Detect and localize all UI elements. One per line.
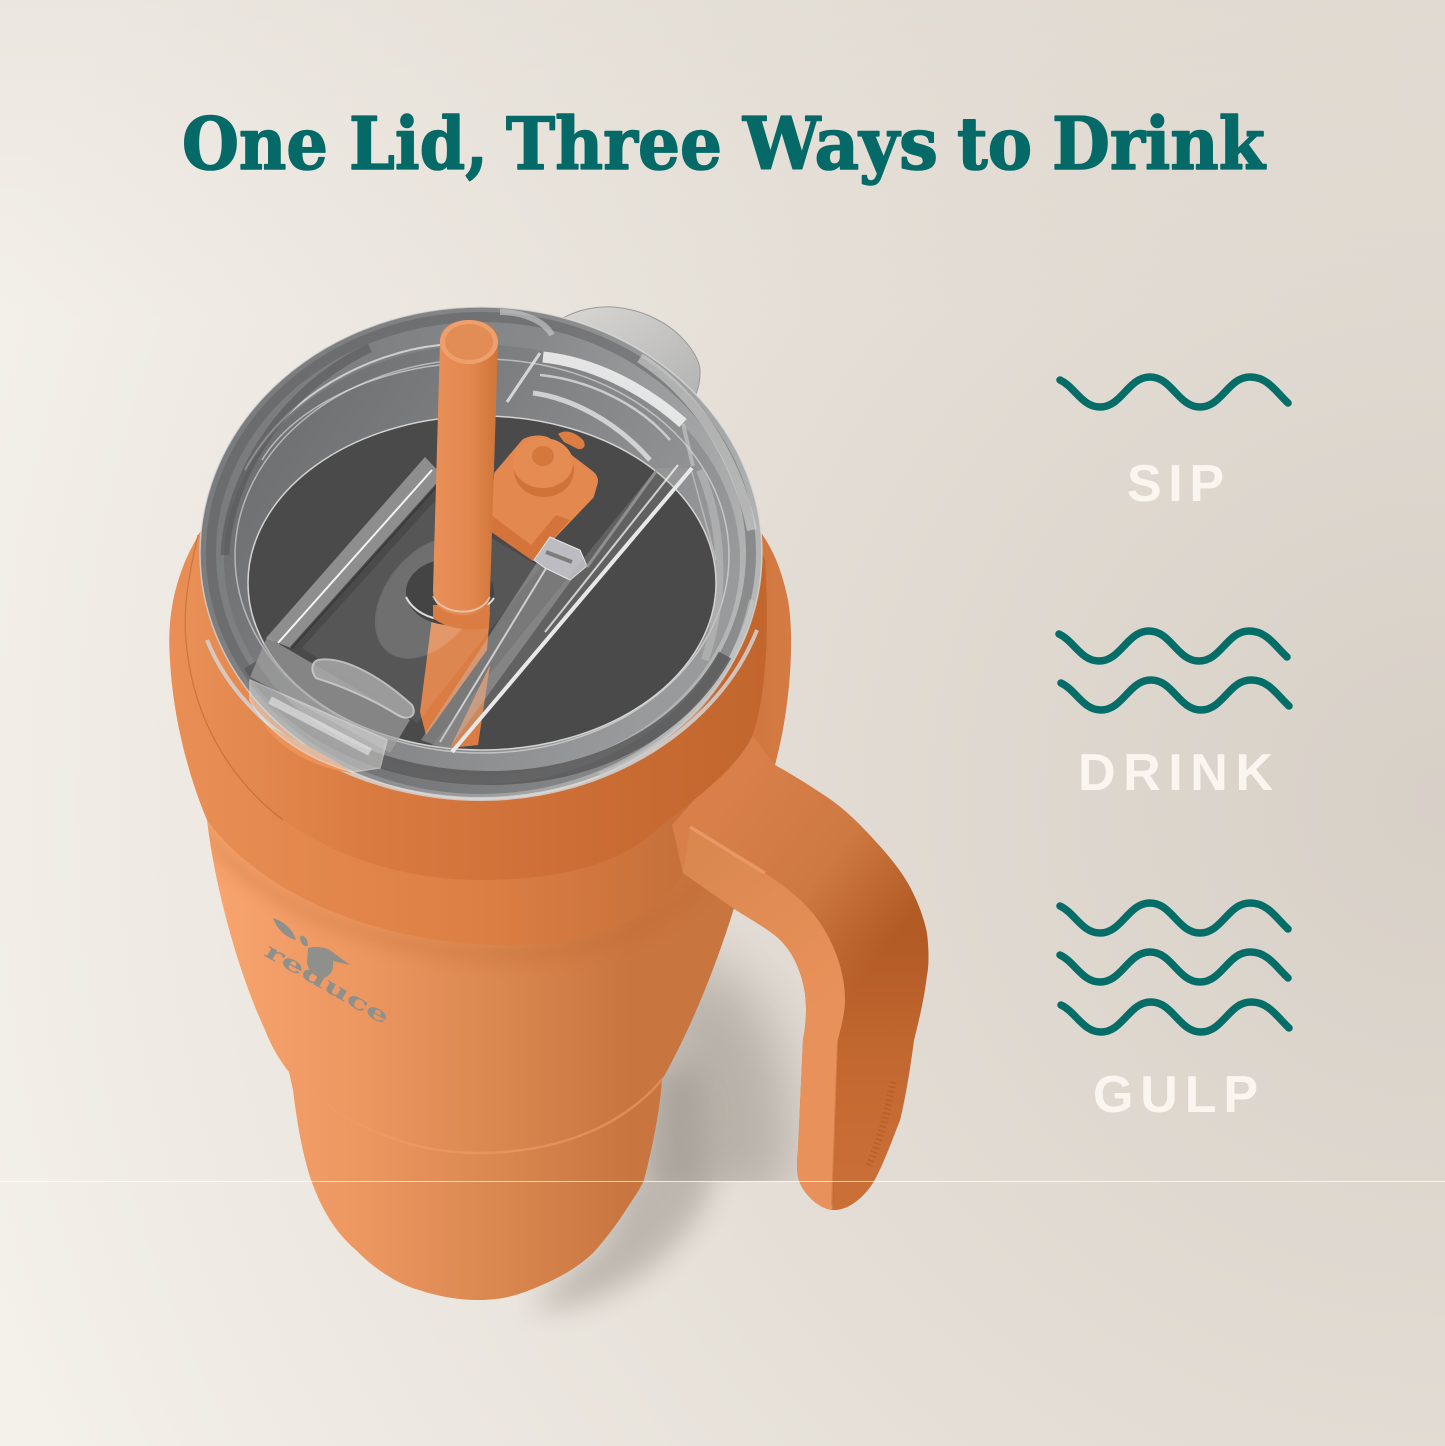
lid — [200, 307, 762, 799]
gulp group — [1060, 903, 1289, 1124]
drink opening — [353, 517, 507, 679]
body — [207, 700, 735, 1300]
dark interior — [248, 416, 716, 750]
logo — [260, 918, 394, 1029]
lid inner ring — [224, 345, 740, 775]
title: to — [957, 101, 1032, 186]
slider channel — [302, 503, 540, 723]
label: gulp: GULP — [1093, 1066, 1258, 1124]
tumbler shadow — [530, 950, 795, 1310]
slider left rail — [266, 457, 444, 648]
handle emboss — [868, 1082, 893, 1168]
label: drink: DRINK — [1078, 744, 1273, 802]
body shading — [200, 830, 720, 1153]
white arcs — [543, 357, 683, 423]
title: Drink — [1052, 101, 1267, 186]
collar — [169, 525, 791, 945]
lid rim — [200, 307, 762, 799]
stopper — [490, 432, 597, 561]
icon: two waves — [1059, 631, 1289, 710]
label: sip: SIP — [1127, 455, 1224, 513]
tumbler — [169, 525, 940, 1300]
slider top edge — [507, 353, 693, 466]
title: Lid, — [349, 101, 488, 186]
sip group — [1060, 377, 1288, 513]
rim streaks — [200, 307, 762, 799]
handle — [672, 735, 940, 1220]
straw — [433, 320, 498, 615]
icon: one wave — [1060, 377, 1288, 407]
title: One — [182, 101, 328, 186]
slider centre rail — [421, 537, 587, 750]
handle front face — [683, 827, 845, 1215]
lower clear tab — [250, 637, 414, 773]
title: Three — [506, 101, 722, 186]
title: Ways — [742, 101, 938, 186]
straw reflection — [420, 610, 490, 748]
logo: reduce — [260, 938, 394, 1029]
collar upper step — [185, 525, 767, 880]
drink group — [1059, 631, 1289, 802]
pull tab — [550, 307, 700, 396]
horizon line — [0, 1181, 1445, 1182]
icon: three waves — [1060, 903, 1289, 1032]
slider right rail — [432, 465, 716, 752]
